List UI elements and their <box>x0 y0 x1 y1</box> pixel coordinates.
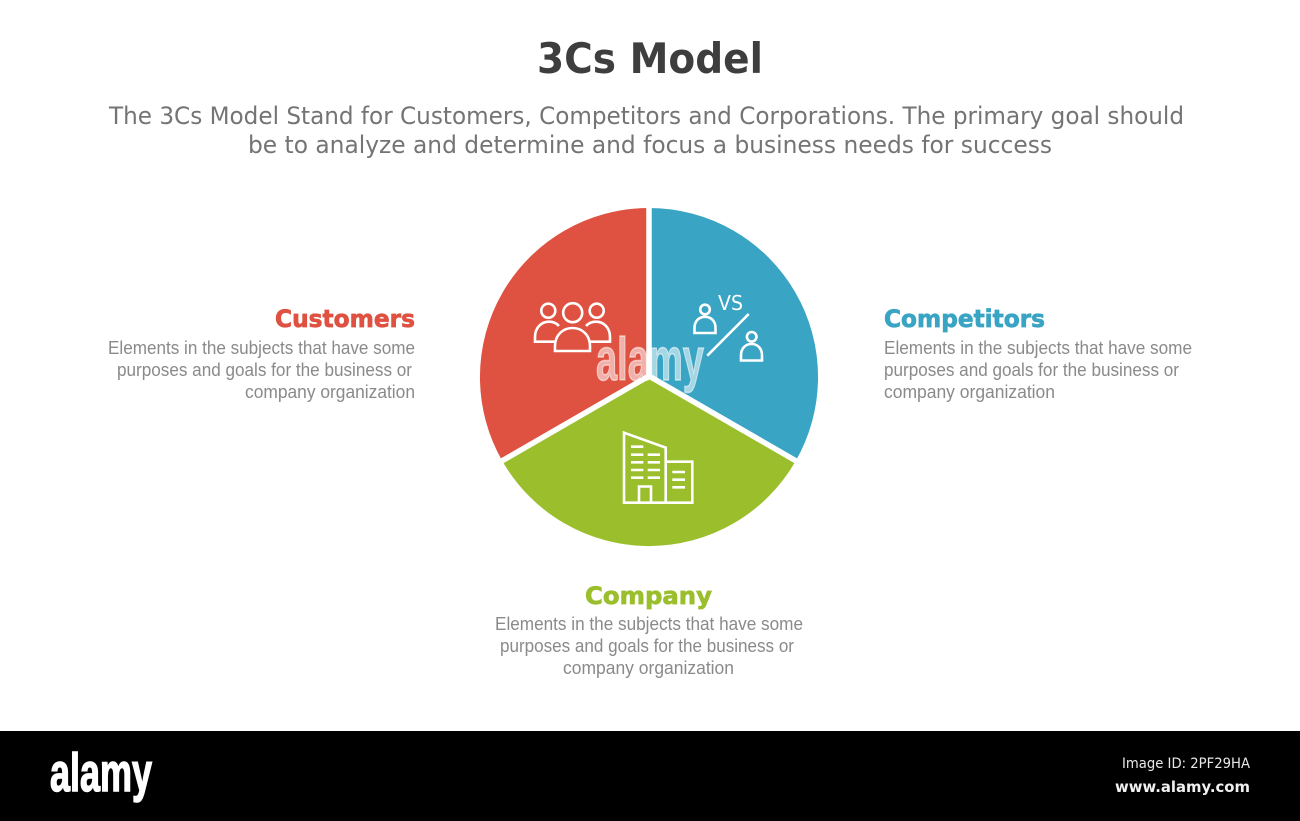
description: company: company organization <box>563 658 734 678</box>
watermark: alamy <box>596 326 704 393</box>
description: customers <box>108 338 415 402</box>
heading: company: Company <box>585 582 712 610</box>
description: customers: Elements in the subjects that have some <box>108 338 415 358</box>
description: customers: company organization <box>245 382 415 402</box>
icon: company building <box>624 433 692 503</box>
description: competitors: purposes and goals for the business or <box>884 360 1179 380</box>
slice: competitors <box>649 208 818 462</box>
icon: versus: VS <box>718 291 743 315</box>
website: www.alamy.com <box>1115 778 1250 796</box>
company text <box>495 582 803 678</box>
icon: customers group <box>535 303 610 351</box>
pie chart <box>480 200 818 546</box>
slice: company <box>503 376 795 546</box>
subtitle <box>108 102 1184 159</box>
description: competitors: company organization <box>884 382 1055 402</box>
heading: customers: Customers <box>275 305 415 333</box>
icon: versus <box>694 291 762 360</box>
title: 3Cs Model <box>537 34 763 83</box>
description: competitors <box>884 338 1192 402</box>
description: competitors: Elements in the subjects that have some <box>884 338 1192 358</box>
description: company: purposes and goals for the business or <box>500 636 794 656</box>
subtitle: The 3Cs Model Stand for Customers, Competitors and Corporations. The primary goal should <box>108 102 1184 130</box>
subtitle: be to analyze and determine and focus a business needs for success <box>248 131 1052 159</box>
description: company: Elements in the subjects that have some <box>495 614 803 634</box>
description: customers: purposes and goals for the business or <box>117 360 412 380</box>
footer bar <box>0 731 1300 821</box>
customers text <box>108 305 415 402</box>
heading: competitors: Competitors <box>884 305 1045 333</box>
slice: customers <box>480 208 649 462</box>
image id: Image ID: 2PF29HA <box>1122 756 1250 772</box>
competitors text <box>884 305 1192 402</box>
footer logo: alamy <box>50 743 152 803</box>
description: company <box>495 614 803 678</box>
